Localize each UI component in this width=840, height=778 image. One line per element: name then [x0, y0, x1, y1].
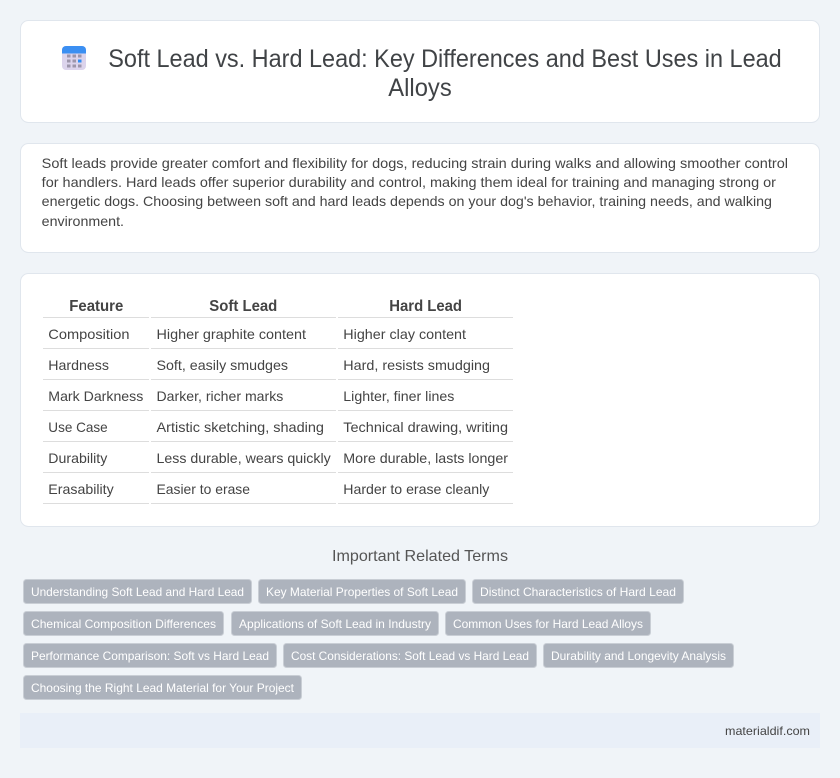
row: composition: Higher clay content [343, 326, 466, 342]
tag: key properties: Key Material Properties of Soft Lead [266, 585, 458, 599]
table header: Soft Lead [209, 298, 277, 315]
title: Soft Lead vs. Hard Lead: Key Differences and Best Uses in Lead [108, 45, 782, 73]
row: durability [43, 450, 513, 473]
comparison table card [20, 274, 820, 526]
row: use case: Artistic sketching, shading [156, 419, 324, 435]
title: Alloys [388, 74, 452, 102]
table header: Hard Lead [389, 298, 462, 315]
related terms heading: Important Related Terms [332, 548, 508, 565]
tag: performance comparison [24, 644, 276, 668]
icon: calendar [62, 46, 86, 70]
title [108, 45, 782, 102]
tag: chemical composition: Chemical Composition Differences [31, 617, 216, 631]
row: erasability: Harder to erase cleanly [343, 481, 489, 497]
footer bar [20, 713, 820, 748]
tag: understanding [24, 580, 252, 604]
tag: understanding: Understanding Soft Lead and Hard Lead [31, 585, 244, 599]
row: use case: Use Case [48, 419, 108, 435]
row: erasability: Easier to erase [156, 481, 250, 497]
intro paragraph: energetic dogs. Choosing between soft and hard leads depends on your dog's behavior, training needs, and walking [42, 193, 772, 209]
row: mark darkness: Lighter, finer lines [343, 388, 454, 404]
row: hardness: Hardness [48, 357, 109, 373]
row: mark darkness: Darker, richer marks [156, 388, 283, 404]
tag: choosing material: Choosing the Right Lead Material for Your Project [31, 681, 295, 695]
row: erasability: Erasability [48, 481, 114, 497]
intro paragraph [42, 155, 788, 229]
table header: Feature [69, 298, 123, 315]
table header [43, 298, 513, 318]
tag: durability [544, 644, 734, 668]
row: use case [43, 419, 513, 442]
row: hardness [43, 357, 513, 380]
row: durability: Durability [48, 450, 107, 466]
tag: choosing material [24, 676, 302, 700]
row: erasability [43, 481, 513, 504]
related term tags [24, 580, 734, 700]
row: composition [43, 326, 513, 349]
tag: applications: Applications of Soft Lead in Industry [239, 617, 431, 631]
row: durability: More durable, lasts longer [343, 450, 508, 466]
tag: distinct characteristics: Distinct Characteristics of Hard Lead [480, 585, 676, 599]
tag: applications [232, 612, 438, 636]
tag: key properties [258, 580, 466, 604]
intro paragraph: for handlers. Hard leads offer superior durability and control, making them ideal for training and managing strong or [42, 174, 776, 190]
tag: cost considerations: Cost Considerations: Soft Lead vs Hard Lead [291, 649, 529, 663]
row: mark darkness [43, 388, 513, 411]
row: hardness: Soft, easily smudges [156, 357, 288, 373]
row: use case: Technical drawing, writing [343, 419, 508, 435]
row: hardness: Hard, resists smudging [343, 357, 490, 373]
row: durability: Less durable, wears quickly [156, 450, 331, 466]
header card [20, 20, 820, 122]
intro text card [20, 144, 820, 252]
intro paragraph: Soft leads provide greater comfort and flexibility for dogs, reducing strain during walks and allowing smoother control [42, 155, 788, 171]
row: composition: Higher graphite content [156, 326, 306, 342]
comparison table [43, 298, 513, 504]
row: mark darkness: Mark Darkness [48, 388, 143, 404]
tag: durability: Durability and Longevity Analysis [551, 649, 726, 663]
footer source: materialdif.com [725, 724, 810, 738]
tag: cost considerations [284, 644, 536, 668]
tag: common uses: Common Uses for Hard Lead Alloys [453, 617, 643, 631]
tag: distinct characteristics [472, 580, 684, 604]
intro paragraph: environment. [42, 213, 124, 229]
tag: chemical composition [24, 612, 224, 636]
tag: performance comparison: Performance Comparison: Soft vs Hard Lead [31, 649, 269, 663]
tag: common uses [446, 612, 650, 636]
row: composition: Composition [48, 326, 129, 342]
